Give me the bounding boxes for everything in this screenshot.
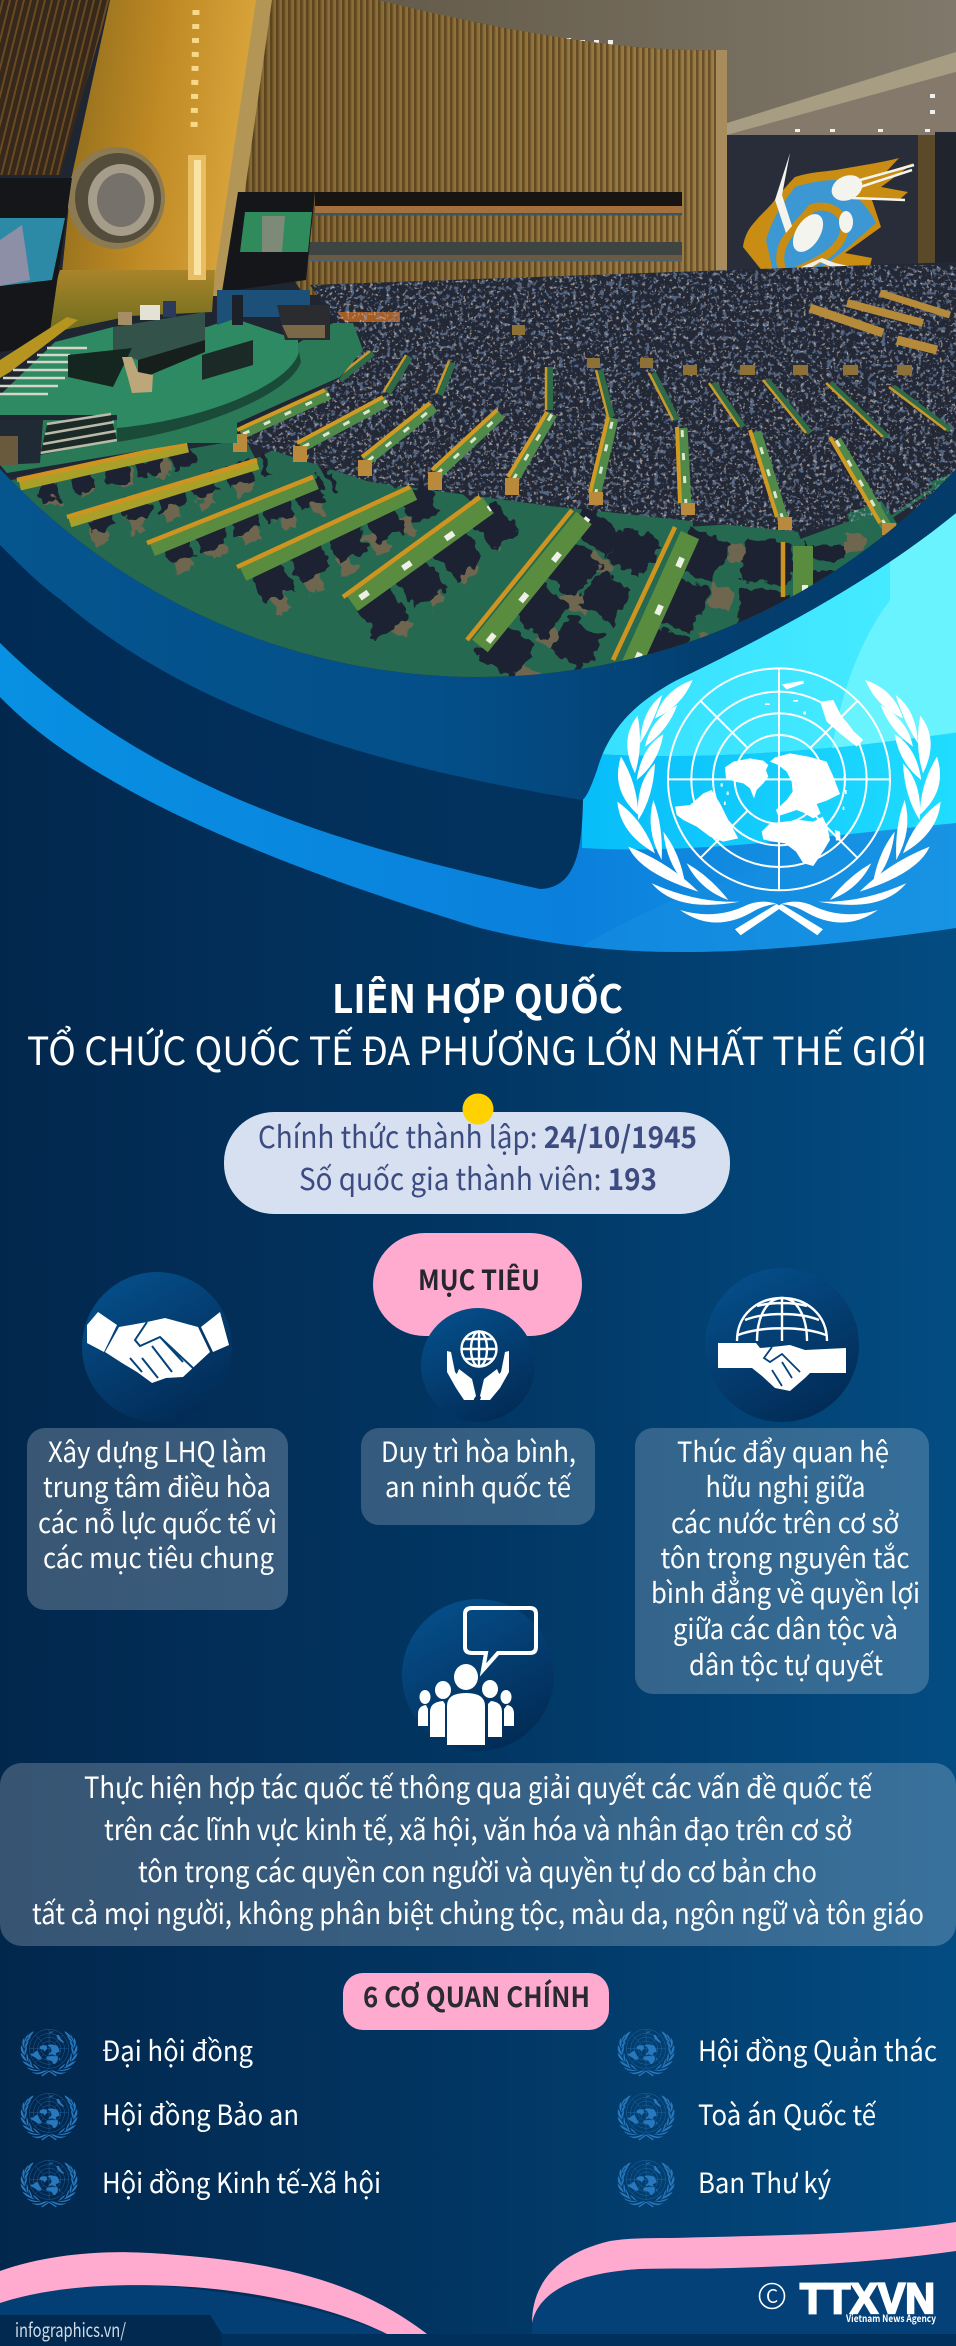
pink swoosh left [0, 2252, 427, 2334]
title [27, 969, 927, 1077]
header wave bands [0, 469, 956, 952]
organs list: Toà án Quốc tế [698, 2094, 876, 2134]
logo: TTXVN: Vietnam News Agency [845, 2310, 936, 2325]
panel: goal 4: trên các lĩnh vực kinh tế, xã hội, văn hóa và nhân đạo trên cơ sở [104, 1807, 852, 1849]
panel: goal 2: Duy trì hòa bình, [381, 1431, 576, 1471]
orange rail [337, 312, 400, 322]
panel: goal 4: tôn trọng các quyền con người và quyền tự do cơ bản cho [138, 1849, 817, 1891]
seal medallion [67, 147, 165, 249]
panel: goal 3: giữa các dân tộc và [673, 1608, 898, 1648]
audience [0, 262, 956, 702]
front floor [10, 442, 952, 677]
panel: goal 1 [27, 1428, 288, 1610]
panel: goal 3: các nước trên cơ sở [671, 1502, 899, 1542]
title line 2: TỔ CHỨC QUỐC TẾ ĐA PHƯƠNG LỚN NHẤT THẾ GIỚI [27, 1021, 927, 1077]
credit: infographics.vn: infographics.vn/ [15, 2316, 126, 2343]
panel: goal 4 [0, 1763, 956, 1946]
heading: goals: MỤC TIÊU [418, 1259, 540, 1299]
panel: goal 1: các nỗ lực quốc tế vì [38, 1502, 277, 1542]
desks back tiers [512, 293, 950, 370]
panel: goal 3: Thúc đẩy quan hệ [677, 1431, 889, 1471]
organ icons [21, 2029, 675, 2207]
gold wall [0, 0, 272, 335]
panel: goal 1: Xây dựng LHQ làm [48, 1431, 267, 1471]
screens [0, 178, 315, 352]
heading: main organs: 6 CƠ QUAN CHÍNH [363, 1976, 590, 2016]
panel: goal 1: trung tâm điều hòa [43, 1466, 271, 1506]
icon: globe in hands [421, 1308, 535, 1422]
panel: goal 2: an ninh quốc tế [385, 1466, 571, 1506]
middle rows people [247, 442, 935, 539]
organs list: Hội đồng Kinh tế-Xã hội [102, 2162, 381, 2202]
panel: goal 3: dân tộc tự quyết [689, 1644, 883, 1684]
wood wall [240, 0, 727, 295]
logo: TTXVN: C [766, 2282, 778, 2309]
heading: main organs [343, 1973, 609, 2030]
panel: goal 3 [635, 1428, 929, 1694]
pink swoosh right [532, 2222, 956, 2323]
heading: goals [373, 1233, 582, 1336]
organs list [102, 2030, 937, 2202]
panel: goal 3: tôn trọng nguyên tắc [660, 1537, 910, 1577]
icon: handshake [82, 1272, 232, 1422]
panel: goal 4: Thực hiện hợp tác quốc tế thông qua giải quyết các vấn đề quốc tế [84, 1765, 873, 1807]
photo: UN General Assembly hall [0, 0, 956, 702]
member count: Số quốc gia thành viên: 193 [299, 1155, 657, 1199]
people front tier [40, 456, 825, 675]
yellow dot [462, 1094, 494, 1124]
green floor and stage [0, 290, 363, 473]
desks middle tier [241, 394, 886, 526]
organs list: Hội đồng Bảo an [102, 2094, 299, 2134]
chairs front tier [43, 462, 855, 684]
logo: TTXVN: TTXVN [800, 2275, 935, 2323]
panel: goal 3: hữu nghị giữa [706, 1466, 866, 1506]
panel: goal 2 [361, 1428, 595, 1525]
UN emblem [617, 668, 941, 935]
ceiling [375, 0, 956, 140]
founding date: Chính thức thành lập: 24/10/1945 [258, 1113, 697, 1157]
desks front tier [20, 448, 258, 523]
panel: goal 1: các mục tiêu chung [43, 1537, 274, 1577]
mural wall [727, 132, 956, 270]
info pill [224, 1094, 730, 1214]
panel: goal 3: bình đẳng về quyền lợi [651, 1572, 920, 1612]
icon: globe dome with handshake [705, 1268, 859, 1422]
title line 1: LIÊN HỢP QUỐC [332, 969, 623, 1025]
organs list: Ban Thư ký [698, 2162, 831, 2202]
icon: people with speech bubble [402, 1599, 554, 1751]
organs list: Hội đồng Quản thác [698, 2030, 937, 2070]
organs list: Đại hội đồng [102, 2030, 253, 2070]
audience speckle [247, 265, 956, 532]
footer swooshes [0, 2222, 956, 2346]
